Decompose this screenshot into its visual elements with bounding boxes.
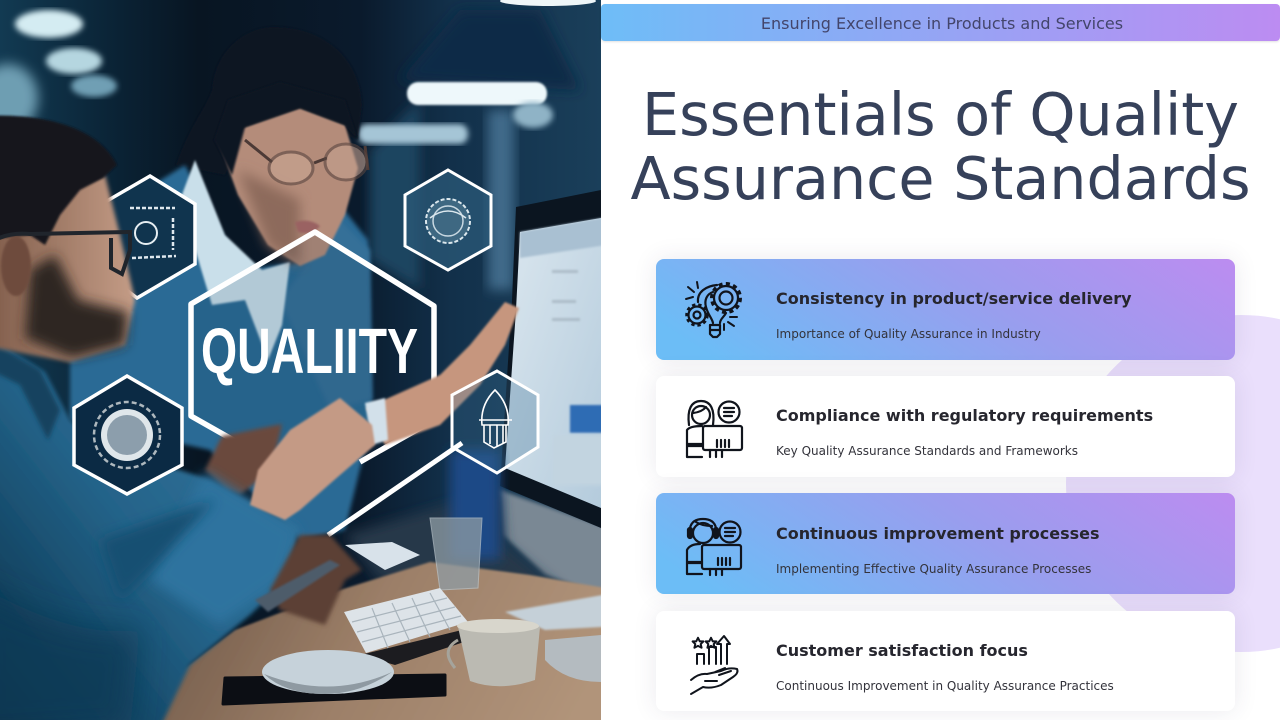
heading: Compliance with regulatory requirements bbox=[776, 406, 1153, 425]
main title: Assurance Standards bbox=[630, 145, 1251, 213]
icon: agent with laptop bbox=[686, 400, 744, 458]
subheading: Key Quality Assurance Standards and Frameworks bbox=[776, 444, 1078, 458]
icon: support agent with headset bbox=[686, 518, 742, 576]
connector line bbox=[328, 443, 462, 535]
icon: light bulb with gears bbox=[685, 281, 742, 338]
card 3: continuous improvement bbox=[656, 493, 1235, 594]
top banner: Ensuring Excellence in Products and Services bbox=[761, 14, 1123, 33]
small hexagon: top left bbox=[100, 176, 195, 298]
decorative lilac ellipse bbox=[1066, 315, 1280, 652]
woman's raised arm and hand bbox=[365, 302, 519, 445]
small hexagon: top right bbox=[405, 170, 491, 270]
man's head with glasses bbox=[0, 115, 135, 362]
top banner bbox=[601, 4, 1280, 41]
main title bbox=[630, 81, 1251, 213]
monitor bbox=[500, 190, 630, 605]
desk bbox=[152, 562, 640, 720]
card 2: compliance bbox=[656, 376, 1235, 477]
woman in blue cardigan bbox=[70, 27, 372, 540]
man in blue shirt bbox=[0, 325, 298, 720]
small hexagon: right bbox=[452, 371, 538, 473]
large hexagon with QUALIITY wordmark bbox=[191, 232, 434, 462]
large hexagon with QUALIITY wordmark: QUALIITY bbox=[201, 315, 418, 387]
small hexagon: lower left bbox=[74, 376, 182, 494]
heading: Consistency in product/service delivery bbox=[776, 289, 1132, 308]
subheading: Importance of Quality Assurance in Industry bbox=[776, 327, 1041, 341]
icon: hand with rating stars and growth bars bbox=[690, 635, 738, 695]
main title: Essentials of Quality bbox=[642, 81, 1239, 149]
subheading: Implementing Effective Quality Assurance Processes bbox=[776, 562, 1091, 576]
subheading: Continuous Improvement in Quality Assurance Practices bbox=[776, 679, 1114, 693]
office background bbox=[0, 0, 601, 720]
photo: two analysts with quality hexagons bbox=[0, 0, 601, 720]
man's far hand bbox=[205, 424, 282, 495]
heading: Continuous improvement processes bbox=[776, 524, 1100, 543]
man's near hand on tablet bbox=[250, 398, 375, 625]
items on desk bbox=[223, 518, 620, 704]
card 4: customer satisfaction bbox=[656, 611, 1235, 711]
heading: Customer satisfaction focus bbox=[776, 641, 1028, 660]
card 1: consistency bbox=[656, 259, 1235, 360]
back table area bbox=[345, 450, 560, 590]
